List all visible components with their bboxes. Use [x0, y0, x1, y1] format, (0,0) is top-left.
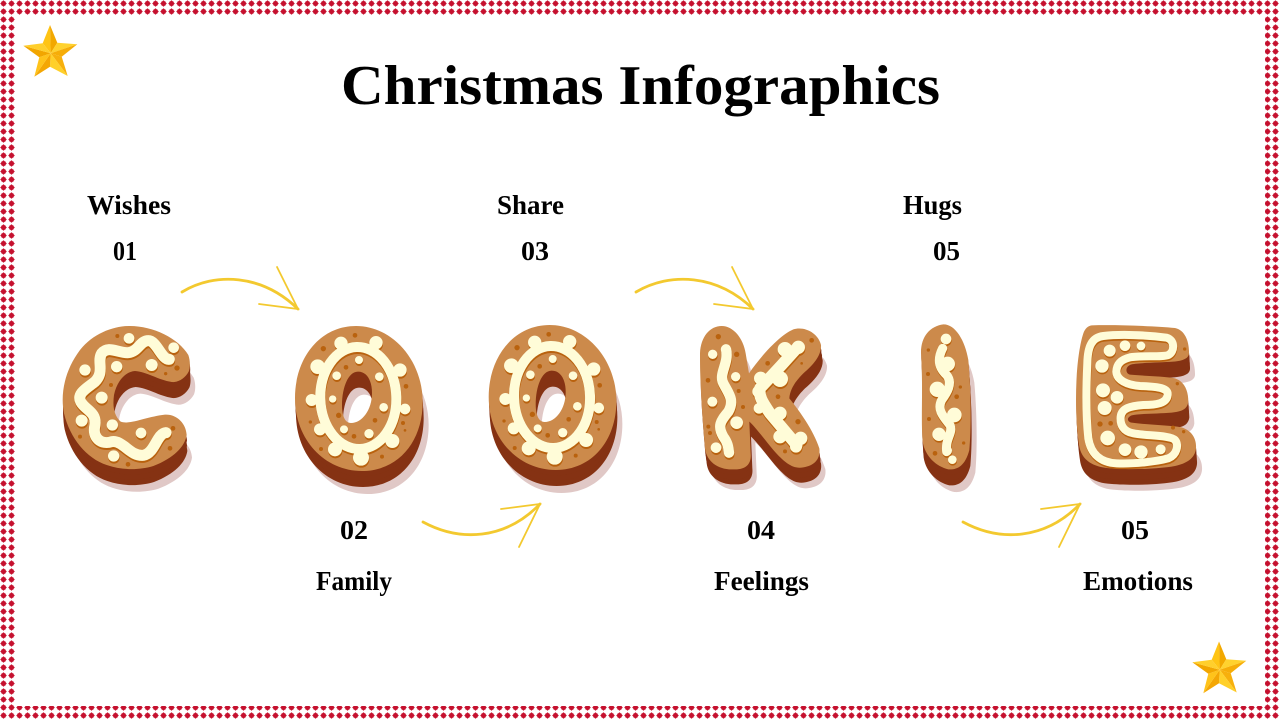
label: Hugs 05: Hugs [903, 190, 962, 220]
label: Wishes 01: 01 [113, 236, 137, 266]
label: Wishes 01: Wishes [87, 190, 171, 220]
label: Share 03: 03 [521, 236, 549, 266]
cookie letter E [1076, 325, 1202, 491]
label: Wishes 01 [87, 190, 171, 266]
icon: gold star bottom right [1192, 642, 1246, 693]
label: Family 02: Family [316, 566, 392, 596]
cookie letter K [700, 326, 827, 490]
label: Family 02 [316, 515, 392, 596]
arrow: C to O [182, 267, 298, 309]
label: Emotions 05: 05 [1121, 515, 1149, 545]
label: Hugs 05 [903, 190, 962, 266]
cookie letter I [921, 324, 977, 492]
label: Hugs 05: 05 [933, 236, 960, 266]
icon: gold star top left [23, 25, 77, 77]
label: Emotions 05 [1083, 515, 1193, 596]
label: Feelings 04: 04 [747, 515, 775, 545]
label: Family 02: 02 [340, 515, 368, 545]
label: Feelings 04 [714, 515, 809, 596]
cookie letter O (second) [489, 325, 622, 493]
label: Emotions 05: Emotions [1083, 566, 1193, 596]
label: Feelings 04: Feelings [714, 566, 809, 596]
cookie letter O (first) [295, 326, 429, 494]
arrow: I to E [963, 504, 1080, 547]
label: Share 03: Share [497, 190, 564, 220]
label: Share 03 [497, 190, 564, 266]
title: Christmas Infographics [341, 55, 940, 117]
cookie letter C [63, 326, 195, 492]
arrow: O to O [423, 504, 540, 547]
arrow: O to K [636, 267, 753, 309]
